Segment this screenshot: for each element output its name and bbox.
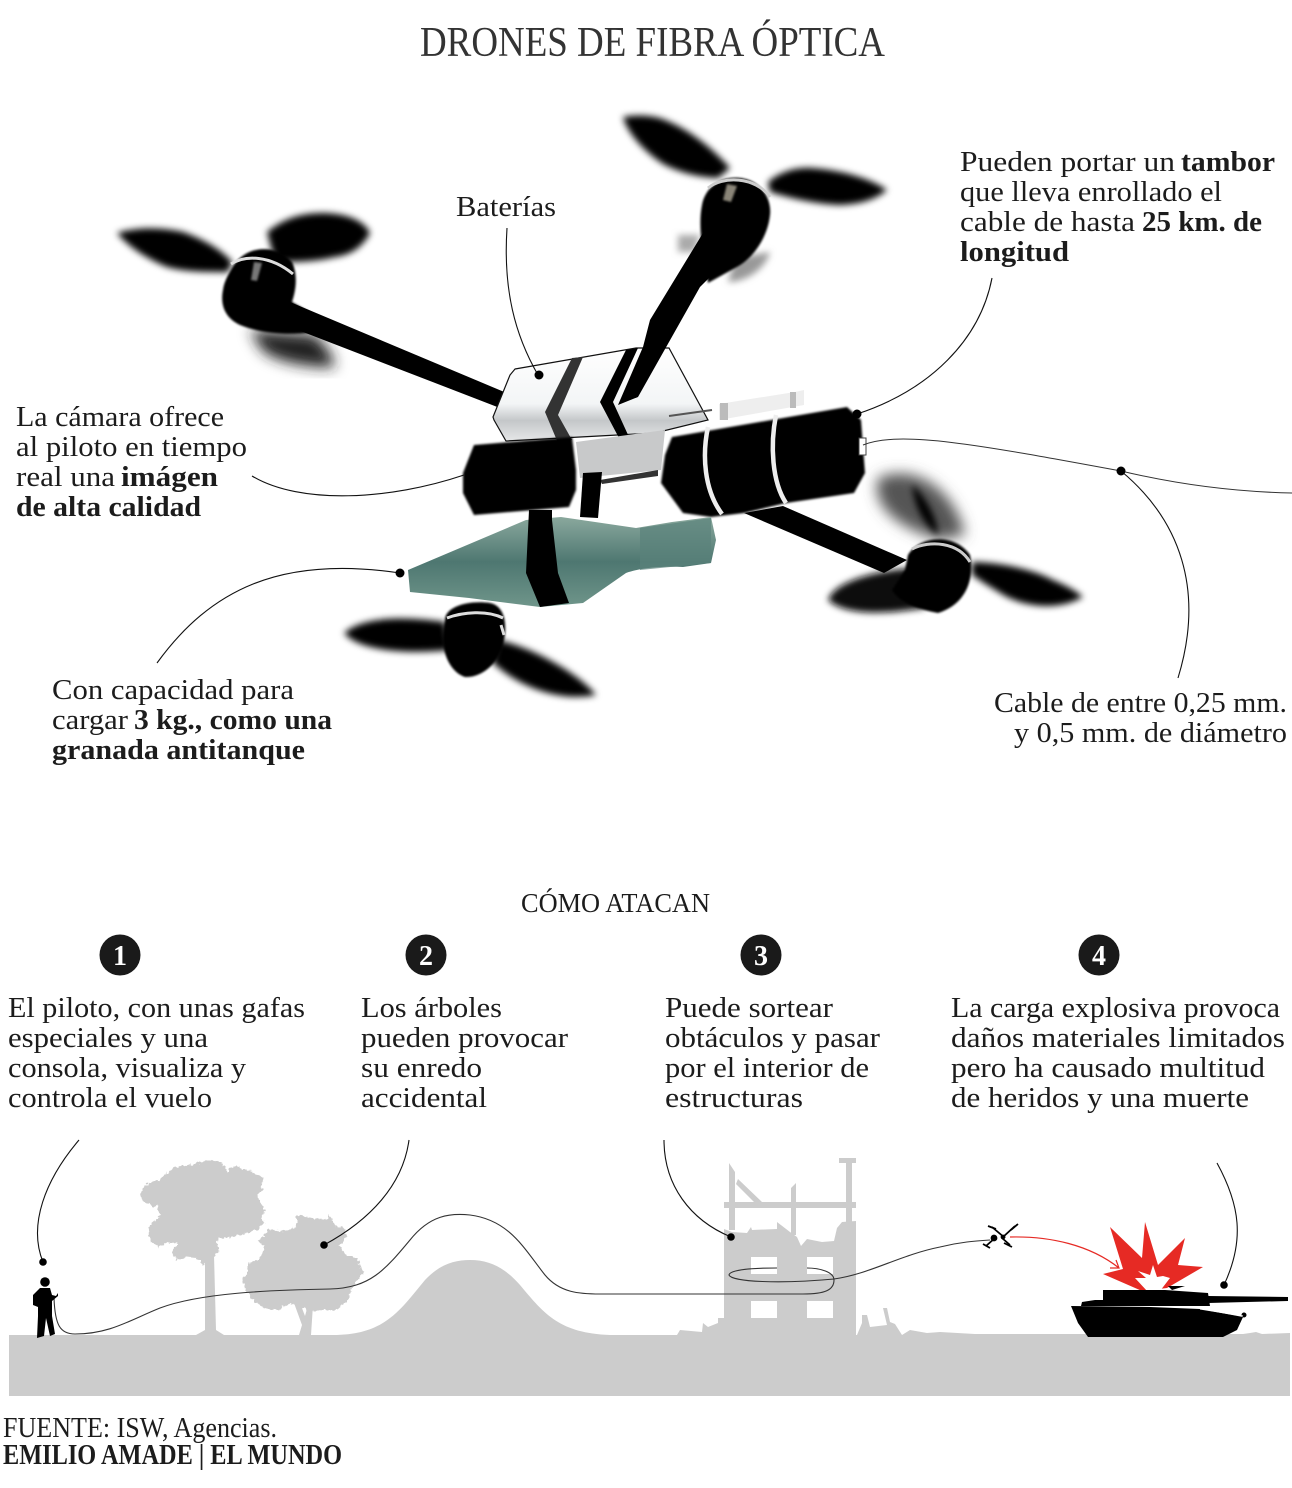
source and credit: FUENTE: ISW, Agencias. xyxy=(3,1413,277,1444)
step 2: pueden provocar xyxy=(361,1023,569,1054)
label: drum: que lleva enrollado el xyxy=(960,177,1222,208)
step 1 xyxy=(8,934,305,1114)
label: camera: La cámara ofrece xyxy=(16,402,224,433)
propeller: far right low xyxy=(828,473,1083,613)
label: drum: Pueden portar un xyxy=(960,147,1175,178)
source and credit: EMILIO AMADE | EL MUNDO xyxy=(3,1440,342,1471)
heading: how they attack: CÓMO ATACAN xyxy=(521,888,710,918)
step 4: de heridos y una muerte xyxy=(951,1083,1249,1114)
step 4: daños materiales limitados xyxy=(951,1023,1285,1054)
red flight arrow xyxy=(1010,1237,1119,1268)
step 2: accidental xyxy=(361,1083,487,1114)
propeller: front right top xyxy=(623,116,887,283)
anti-tank grenade xyxy=(408,510,716,607)
label: cable xyxy=(863,439,1292,749)
step 3: obtáculos y pasar xyxy=(665,1023,881,1054)
tree: small xyxy=(242,1215,365,1335)
label: drum: cable de hasta xyxy=(960,207,1136,238)
tree: large xyxy=(140,1160,265,1335)
arm xyxy=(285,302,540,420)
step 2: 2 xyxy=(419,941,433,972)
step 4: 4 xyxy=(1092,941,1106,972)
arm: front right xyxy=(744,506,907,573)
attack scene xyxy=(9,1158,1290,1396)
step 4: La carga explosiva provoca xyxy=(951,993,1281,1024)
leader: step 4 xyxy=(1217,1163,1237,1289)
leader: step 3 xyxy=(664,1140,735,1241)
label: camera: imágen xyxy=(121,462,218,493)
fuselage xyxy=(576,430,665,478)
ground and hill xyxy=(9,1260,1290,1396)
pilot xyxy=(33,1277,58,1338)
step 4: pero ha causado multitud xyxy=(951,1053,1265,1084)
label: camera: de alta calidad xyxy=(16,492,201,523)
label: payload xyxy=(52,568,404,766)
step 2: su enredo xyxy=(361,1053,482,1084)
label: drum xyxy=(852,147,1275,418)
propeller: rear left xyxy=(117,213,540,420)
label: drum: longitud xyxy=(960,237,1069,268)
battery xyxy=(493,348,708,441)
arm: battery to top motor xyxy=(618,233,710,405)
label: drum: tambor xyxy=(1181,147,1275,178)
fibre rail xyxy=(719,390,804,420)
motor xyxy=(222,249,320,334)
tank xyxy=(1071,1286,1288,1337)
fibre drum xyxy=(661,407,866,517)
label: drum: 25 km. de xyxy=(1142,207,1262,238)
strut xyxy=(580,472,602,518)
label: cable: y 0,5 mm. de diámetro xyxy=(1014,718,1287,749)
small drone xyxy=(983,1224,1018,1248)
leader: step 2 xyxy=(320,1140,409,1249)
label: payload: 3 kg., como una xyxy=(134,705,332,736)
step 1: El piloto, con unas gafas xyxy=(8,993,305,1024)
title: DRONES DE FIBRA ÓPTICA xyxy=(420,19,886,66)
ruined building xyxy=(724,1158,856,1335)
step 3 xyxy=(665,934,881,1114)
label: camera xyxy=(16,402,464,523)
step 4 xyxy=(951,934,1285,1114)
explosion xyxy=(1103,1222,1203,1291)
source and credit xyxy=(3,1413,342,1471)
step 3: estructuras xyxy=(665,1083,803,1114)
step 3: 3 xyxy=(754,941,768,972)
step 3: por el interior de xyxy=(665,1053,869,1084)
label: cable: Cable de entre 0,25 mm. xyxy=(994,688,1287,719)
step 2: Los árboles xyxy=(361,993,502,1024)
label: payload: granada antitanque xyxy=(52,735,305,766)
step 1: controla el vuelo xyxy=(8,1083,212,1114)
step 1: especiales y una xyxy=(8,1023,209,1054)
step 1: 1 xyxy=(113,941,127,972)
propeller: front low xyxy=(344,602,596,697)
step 2 xyxy=(361,934,569,1114)
label: camera: al piloto en tiempo xyxy=(16,432,247,463)
label: batteries: Baterías xyxy=(456,192,556,223)
camera xyxy=(463,437,576,515)
step 3: Puede sortear xyxy=(665,993,834,1024)
grenade strap xyxy=(526,510,569,607)
drone illustration xyxy=(117,116,1083,697)
label: payload: cargar xyxy=(52,705,129,736)
label: batteries xyxy=(456,192,556,380)
label: payload: Con capacidad para xyxy=(52,675,295,706)
battery straps xyxy=(545,357,583,443)
leader: step 1 xyxy=(38,1140,79,1266)
label: camera: real una xyxy=(16,462,116,493)
step 1: consola, visualiza y xyxy=(8,1053,246,1084)
fibre optic cable path xyxy=(54,1214,990,1334)
